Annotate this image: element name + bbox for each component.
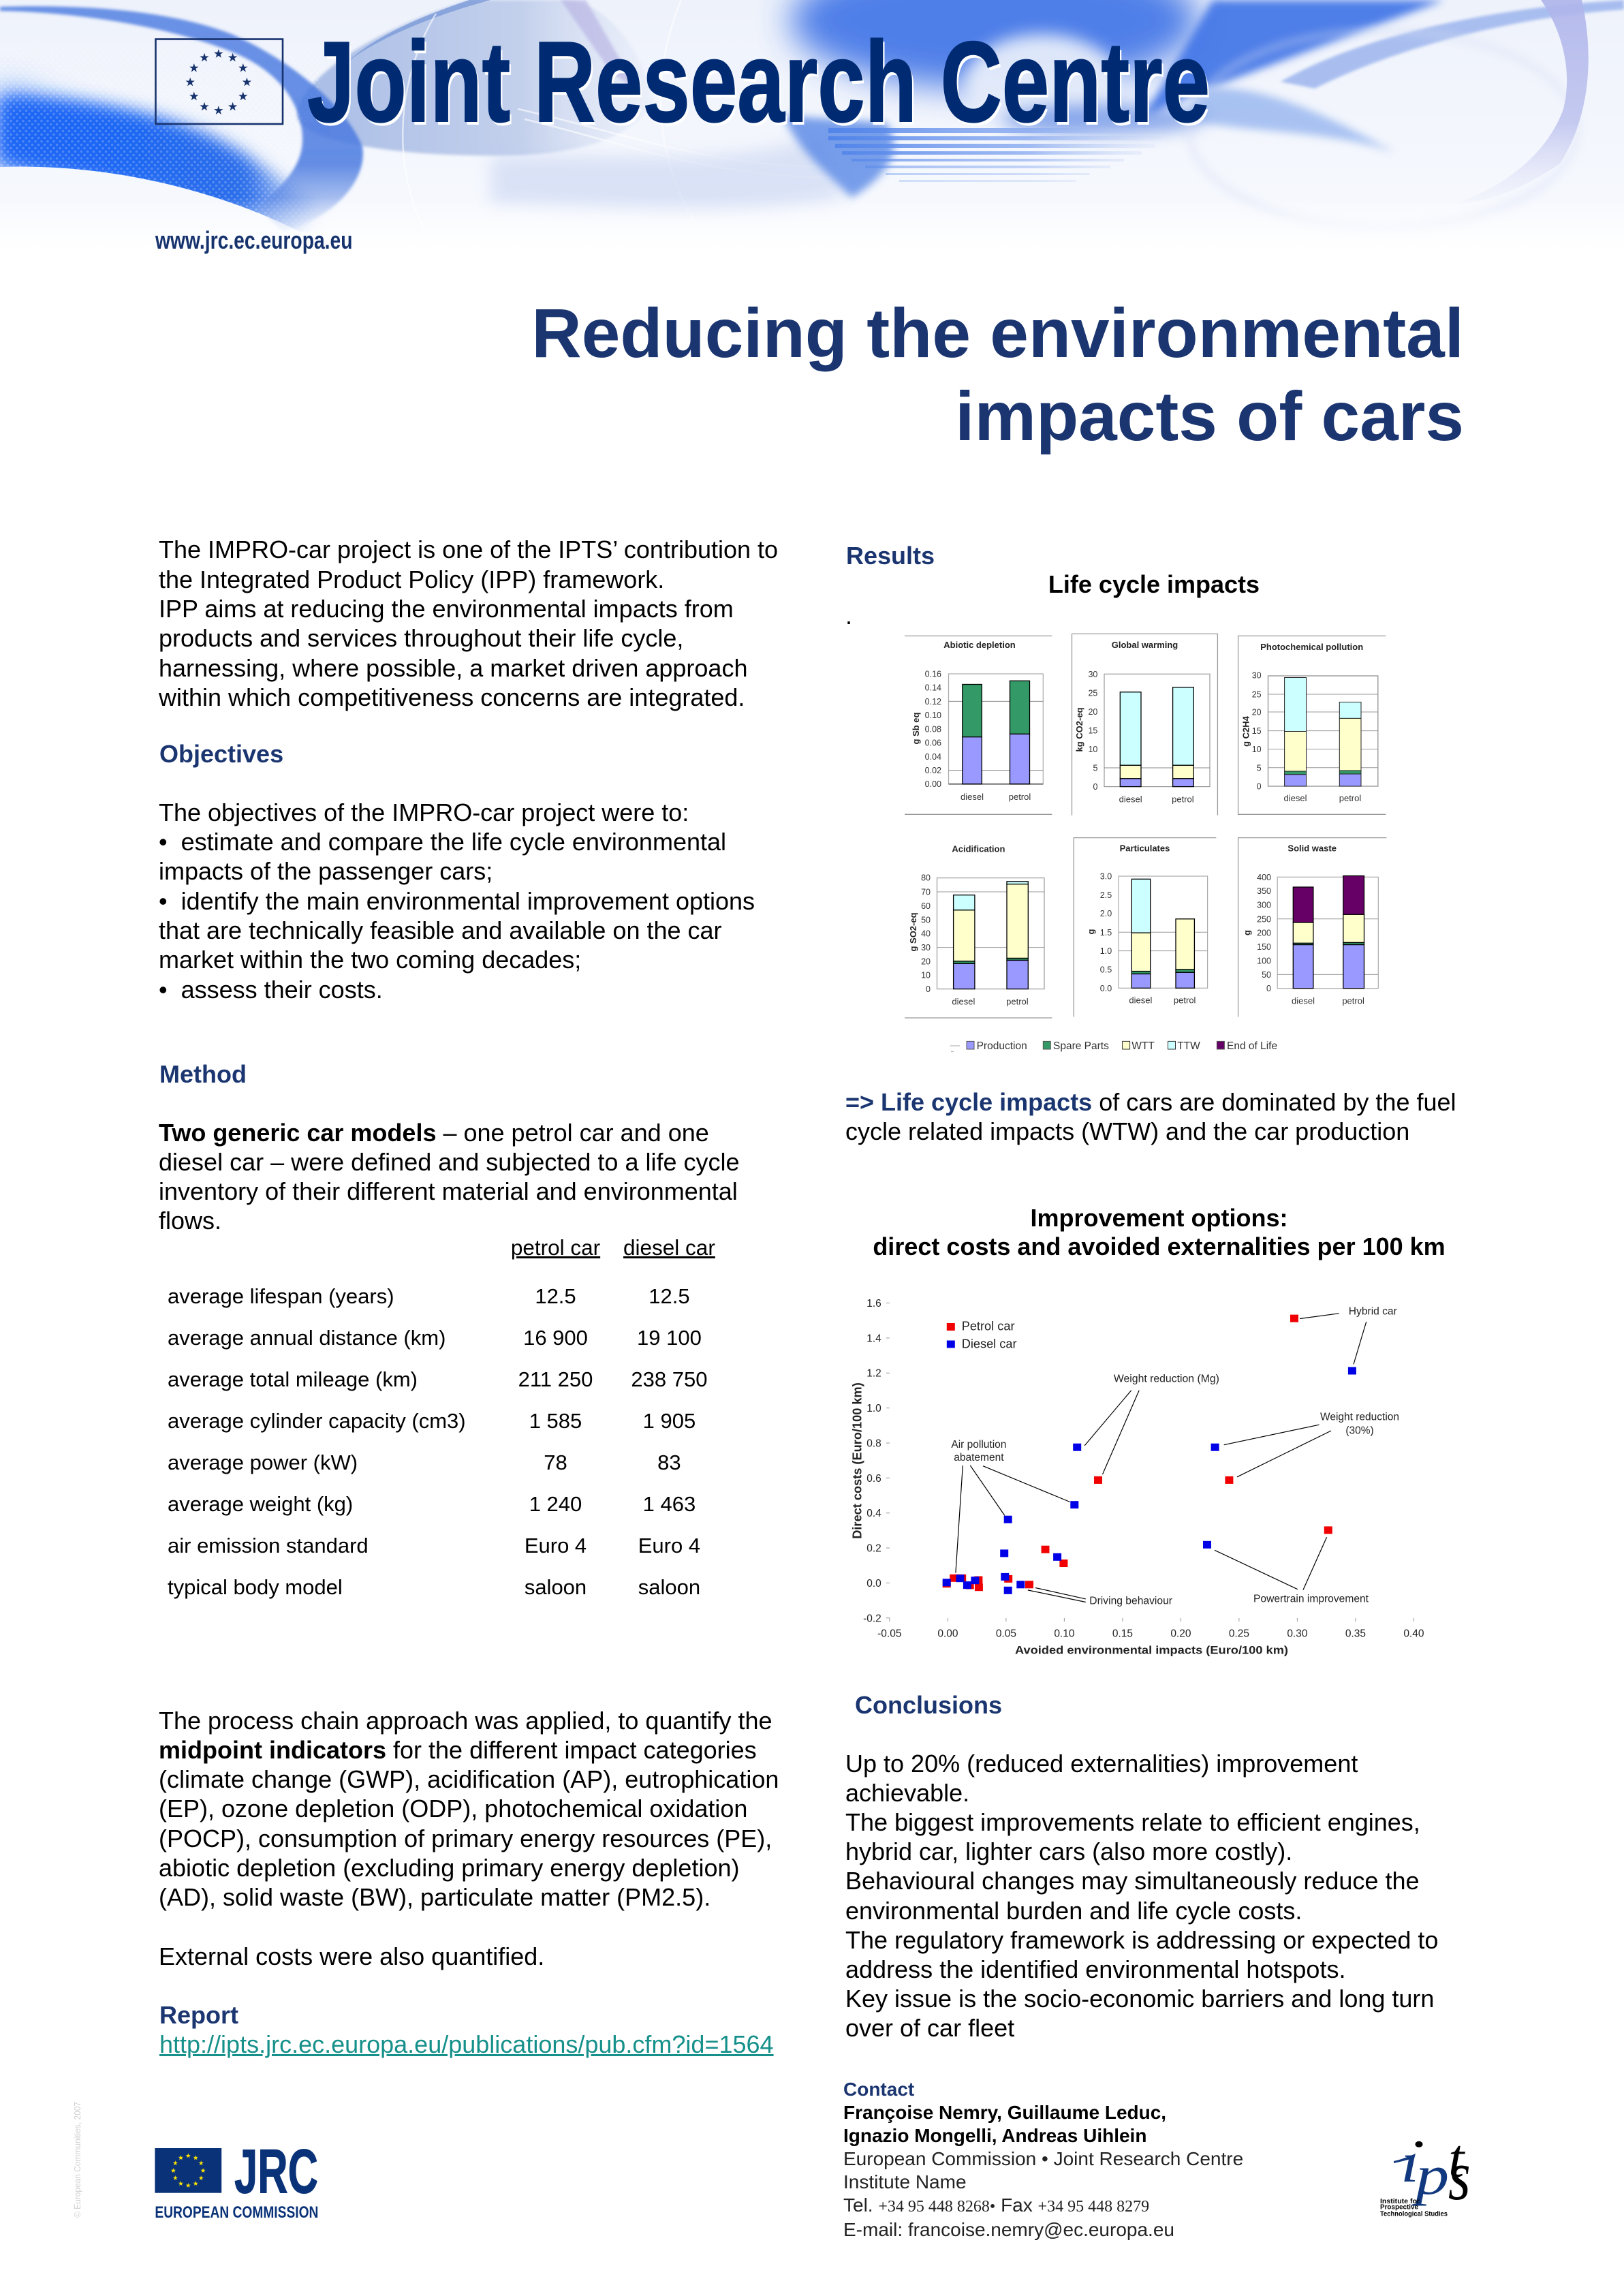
- chart: global warming: 15: [1088, 726, 1097, 736]
- logo: IPTS: Institute for: [1380, 2197, 1420, 2205]
- chart: solid waste: 300: [1257, 901, 1271, 910]
- text block: objectives: [159, 798, 755, 1004]
- chart: particulates: 1.0: [1100, 946, 1112, 956]
- table: car model characteristics: saloon: [525, 1575, 587, 1599]
- scatter chart: direct costs vs avoided environmental impacts: Weight reduction: [1320, 1412, 1399, 1423]
- text block: introduction: within which competitiveness concerns are integrated.: [159, 683, 745, 711]
- scatter chart: direct costs vs avoided environmental impacts: 0.6: [866, 1473, 881, 1485]
- icon: EU flag outline with twelve stars: [155, 40, 283, 124]
- scatter chart: direct costs vs avoided environmental impacts: 0.30: [1287, 1628, 1308, 1639]
- chart: abiotic depletion: petrol: [1009, 792, 1031, 802]
- heading: conclusions: Conclusions: [855, 1691, 1002, 1719]
- scatter chart: direct costs vs avoided environmental impacts: 1.2: [866, 1368, 881, 1380]
- chart: photochemical pollution: 10: [1252, 745, 1262, 754]
- chart: acidification: [905, 843, 1052, 1018]
- legend: petrol and diesel markers: Petrol car: [962, 1320, 1015, 1333]
- table: car model characteristics: air emission standard: [168, 1534, 369, 1557]
- text block: objectives: impacts of the passenger cars;: [159, 857, 493, 885]
- text block: objectives: • estimate and compare the life cycle environmental: [159, 828, 726, 856]
- text block: process chain approach: abiotic depletion (excluding primary energy depletion): [159, 1854, 740, 1882]
- text block: conclusions: The regulatory framework is addressing or expected to: [845, 1926, 1438, 1954]
- chart: abiotic depletion: 0.16: [925, 669, 941, 679]
- chart: abiotic depletion: 0.06: [925, 739, 941, 748]
- chart: particulates: petrol: [1174, 995, 1196, 1005]
- chart: photochemical pollution: g C2H4: [1241, 715, 1251, 747]
- chart: abiotic depletion: [905, 636, 1052, 814]
- legend: petrol and diesel markers: Diesel car: [962, 1337, 1017, 1351]
- text block: contact: [843, 2079, 1243, 2240]
- scatter chart: direct costs vs avoided environmental impacts: [851, 1298, 1424, 1656]
- logo: IPTS: Prospective: [1380, 2203, 1418, 2212]
- chart: solid waste: petrol: [1342, 995, 1364, 1006]
- text block: results finding: cycle related impacts (WTW) and the car production: [845, 1117, 1409, 1145]
- text block: conclusions: address the identified environmental hotspots.: [845, 1955, 1345, 1983]
- scatter chart: direct costs vs avoided environmental impacts: Hybrid car: [1349, 1306, 1397, 1318]
- text block: contact: Institute Name: [843, 2171, 967, 2192]
- chart: solid waste: 50: [1262, 970, 1271, 980]
- chart: photochemical pollution: 25: [1252, 689, 1262, 699]
- chart: abiotic depletion: diesel: [961, 792, 984, 802]
- scatter chart: direct costs vs avoided environmental impacts: abatement: [954, 1452, 1004, 1463]
- header banner background: [0, 0, 1624, 251]
- chart: particulates: Particulates: [1120, 843, 1170, 853]
- text block: contact: Ignazio Mongelli, Andreas Uihlein: [843, 2125, 1146, 2146]
- scatter chart: direct costs vs avoided environmental impacts: Air pollution: [951, 1439, 1006, 1450]
- scatter chart: direct costs vs avoided environmental impacts: 0.25: [1229, 1628, 1249, 1639]
- chart: solid waste: 150: [1257, 942, 1271, 952]
- legend: life cycle stages: Spare Parts: [1053, 1040, 1109, 1052]
- scatter chart: direct costs vs avoided environmental impacts: Powertrain improvement: [1253, 1593, 1369, 1605]
- scatter chart: direct costs vs avoided environmental impacts: -0.05: [877, 1628, 901, 1639]
- chart: photochemical pollution: Photochemical pollution: [1260, 642, 1363, 652]
- logo: IPTS: p: [1411, 2144, 1449, 2206]
- text block: process chain approach: midpoint indicators for the different impact categories: [159, 1736, 757, 1764]
- text block: introduction: products and services throughout their life cycle,: [159, 624, 683, 652]
- chart: abiotic depletion: 0.12: [925, 697, 941, 707]
- chart: acidification: 20: [921, 957, 931, 966]
- heading: objectives: Objectives: [159, 740, 283, 768]
- chart: photochemical pollution: [1238, 636, 1386, 814]
- table: car model characteristics: 12.5: [535, 1284, 576, 1308]
- chart: global warming: 0: [1093, 782, 1097, 792]
- table: car model characteristics: 16 900: [523, 1326, 588, 1350]
- text block: conclusions: [845, 1750, 1438, 2042]
- scatter chart: direct costs vs avoided environmental impacts: 0.20: [1170, 1628, 1191, 1639]
- chart: abiotic depletion: 0.00: [925, 779, 941, 789]
- scatter chart: direct costs vs avoided environmental impacts: (30%): [1345, 1425, 1374, 1436]
- scatter chart: direct costs vs avoided environmental impacts: 0.2: [866, 1542, 881, 1555]
- chart: solid waste: [1238, 838, 1386, 1017]
- table: car model characteristics: 1 905: [643, 1409, 696, 1433]
- legend: life cycle stages: TTW: [1177, 1040, 1200, 1052]
- chart: abiotic depletion: g Sb eq: [911, 712, 921, 744]
- poster title: Reducing the environmental: [531, 294, 1464, 372]
- text block: introduction: harnessing, where possible, a market driven approach: [159, 654, 747, 682]
- chart: abiotic depletion: 0.04: [925, 752, 941, 762]
- chart: acidification: 30: [921, 943, 931, 952]
- scatter chart: direct costs vs avoided environmental impacts: 1.4: [866, 1333, 881, 1344]
- table: car model characteristics: 19 100: [637, 1326, 702, 1350]
- text block: introduction: [159, 536, 778, 711]
- scatter chart: direct costs vs avoided environmental impacts: 0.4: [866, 1508, 881, 1519]
- chart: abiotic depletion: 0.10: [925, 711, 941, 720]
- heading: method: Method: [159, 1060, 247, 1088]
- logo: IPTS: s: [1448, 2135, 1471, 2215]
- text block: method: Two generic car models – one petrol car and one: [159, 1119, 709, 1147]
- text block: conclusions: hybrid car, lighter cars (also more costly).: [845, 1837, 1292, 1865]
- text block: objectives: that are technically feasible and available on the car: [159, 916, 722, 944]
- scatter chart: direct costs vs avoided environmental impacts: 0.15: [1112, 1628, 1133, 1639]
- heading: report: Report: [159, 2001, 238, 2029]
- chart: global warming: 20: [1088, 707, 1097, 717]
- legend: life cycle stages: [950, 1040, 1277, 1052]
- banner URL: www.jrc.ec.europa.eu: [155, 226, 353, 254]
- text block: conclusions: Behavioural changes may simultaneously reduce the: [845, 1867, 1419, 1895]
- poster title: impacts of cars: [955, 377, 1464, 455]
- scatter chart: direct costs vs avoided environmental impacts: 1.0: [866, 1403, 881, 1414]
- text block: method: flows.: [159, 1207, 221, 1235]
- chart: solid waste: 250: [1257, 914, 1271, 924]
- text block: introduction: The IMPRO-car project is one of the IPTS’ contribution to: [159, 536, 778, 563]
- chart: solid waste: 350: [1257, 886, 1271, 896]
- chart heading: improvement options: [873, 1204, 1446, 1260]
- scatter chart: direct costs vs avoided environmental impacts: 0.10: [1054, 1628, 1075, 1639]
- table: car model characteristics: Euro 4: [525, 1534, 587, 1557]
- chart: abiotic depletion: Abiotic depletion: [943, 640, 1016, 650]
- text block: results finding: [845, 1088, 1456, 1145]
- table: car model characteristics: saloon: [638, 1575, 700, 1599]
- scatter chart: direct costs vs avoided environmental impacts: 1.6: [866, 1298, 881, 1309]
- chart: global warming: [1072, 634, 1217, 816]
- chart: acidification: g SO2-eq: [908, 912, 918, 952]
- text block: contact: E-mail: francoise.nemry@ec.europa.eu: [843, 2219, 1174, 2240]
- text block: process chain approach: (POCP), consumption of primary energy resources (PE),: [159, 1825, 772, 1852]
- chart: particulates: [1074, 838, 1216, 1017]
- chart: solid waste: 0: [1266, 984, 1271, 993]
- chart: solid waste: 400: [1257, 873, 1271, 882]
- legend: life cycle stages: WTT: [1131, 1040, 1155, 1052]
- table: car model characteristics: petrol car: [511, 1235, 600, 1260]
- chart: solid waste: 100: [1257, 957, 1271, 966]
- text block: results finding: => Life cycle impacts of cars are dominated by the fuel: [845, 1088, 1456, 1116]
- text block: introduction: IPP aims at reducing the environmental impacts from: [159, 595, 734, 623]
- scatter chart: direct costs vs avoided environmental impacts: Weight reduction (Mg): [1114, 1374, 1219, 1384]
- legend: life cycle stages: End of Life: [1227, 1040, 1277, 1052]
- table: car model characteristics: average annual distance (km): [168, 1326, 446, 1350]
- text block: process chain approach: (EP), ozone depletion (ODP), photochemical oxidation: [159, 1795, 747, 1822]
- chart: solid waste: 200: [1257, 929, 1271, 938]
- poster title: [531, 294, 1464, 455]
- text block: method: diesel car – were defined and subjected to a life cycle: [159, 1148, 740, 1176]
- text block: contact: Contact: [843, 2079, 914, 2100]
- chart: global warming: kg CO2-eq: [1074, 707, 1084, 752]
- chart: particulates: 3.0: [1100, 872, 1112, 882]
- chart heading: improvement options: Improvement options:: [1030, 1204, 1288, 1232]
- chart: solid waste: g: [1242, 930, 1252, 935]
- chart: photochemical pollution: 15: [1252, 726, 1262, 736]
- chart: photochemical pollution: diesel: [1284, 793, 1307, 803]
- chart: photochemical pollution: petrol: [1339, 793, 1361, 803]
- chart: particulates: 0.0: [1100, 984, 1112, 993]
- table: car model characteristics: 238 750: [631, 1367, 707, 1391]
- chart: acidification: 0: [926, 984, 931, 994]
- scatter chart: direct costs vs avoided environmental impacts: 0.0: [866, 1578, 881, 1589]
- chart: photochemical pollution: 0: [1257, 782, 1262, 792]
- text block: contact: Françoise Nemry, Guillaume Leduc,: [843, 2102, 1166, 2123]
- logo: JRC European Commission: JRC: [234, 2137, 318, 2207]
- chart: global warming: 10: [1088, 745, 1097, 754]
- heading: results: Results: [846, 542, 935, 570]
- link: report URL: http://ipts.jrc.ec.europa.eu/publications/pub.cfm?id=1564: [159, 2030, 774, 2058]
- scatter chart: direct costs vs avoided environmental impacts: 0.8: [866, 1438, 881, 1450]
- table: car model characteristics: 1 585: [529, 1409, 582, 1433]
- table: car model characteristics: 83: [657, 1450, 681, 1474]
- chart: particulates: 2.0: [1100, 909, 1112, 918]
- text block: external costs: External costs were also quantified.: [159, 1942, 544, 1970]
- table: car model characteristics: Euro 4: [638, 1534, 700, 1557]
- chart: global warming: 25: [1088, 688, 1097, 698]
- chart: particulates: 0.5: [1100, 965, 1112, 974]
- chart: particulates: 2.5: [1100, 890, 1112, 900]
- chart: acidification: 10: [921, 971, 931, 980]
- chart: acidification: 70: [921, 887, 931, 897]
- chart: photochemical pollution: 20: [1252, 707, 1262, 717]
- chart: particulates: 1.5: [1100, 928, 1112, 937]
- logo: IPTS: i: [1401, 2130, 1419, 2194]
- scatter chart: direct costs vs avoided environmental impacts: 0.35: [1345, 1628, 1366, 1639]
- text block: conclusions: The biggest improvements relate to efficient engines,: [845, 1808, 1420, 1836]
- table: car model characteristics: 78: [544, 1450, 567, 1474]
- chart heading: improvement options: direct costs and avoided externalities per 100 km: [873, 1232, 1446, 1260]
- table: car model characteristics: average weight (kg): [168, 1492, 353, 1516]
- chart: acidification: 50: [921, 915, 931, 925]
- logo: IPTS: t: [1448, 2128, 1466, 2189]
- text block: objectives: • identify the main environmental improvement options: [159, 887, 755, 915]
- chart: particulates: g: [1086, 929, 1096, 934]
- text block: conclusions: environmental burden and life cycle costs.: [845, 1897, 1302, 1925]
- chart: photochemical pollution: 5: [1257, 763, 1262, 773]
- legend: life cycle stages: Production: [977, 1040, 1027, 1052]
- table: car model characteristics: 1 240: [529, 1492, 582, 1516]
- chart: abiotic depletion: 0.02: [925, 766, 941, 775]
- chart: global warming: 5: [1093, 763, 1097, 773]
- text block: process chain approach: [159, 1707, 779, 1911]
- scatter chart: direct costs vs avoided environmental impacts: -0.2: [863, 1613, 881, 1624]
- table: car model characteristics: 211 250: [518, 1367, 593, 1391]
- scatter chart: direct costs vs avoided environmental impacts: Direct costs (Euro/100 km): [851, 1382, 864, 1539]
- chart: photochemical pollution: 30: [1252, 670, 1262, 680]
- text block: objectives: market within the two coming decades;: [159, 946, 581, 974]
- banner title: Joint Research Centre: Joint Research Centre: [307, 18, 1210, 146]
- chart: particulates: diesel: [1129, 995, 1152, 1005]
- chart: acidification: diesel: [952, 997, 975, 1007]
- scatter chart: direct costs vs avoided environmental impacts: Avoided environmental impacts (Euro/100 km): [1015, 1643, 1288, 1656]
- copyright note: © European Communities, 2007: [73, 2102, 82, 2218]
- text block: process chain approach: The process chain approach was applied, to quantify the: [159, 1707, 772, 1735]
- text block: method: inventory of their different material and environmental: [159, 1177, 738, 1205]
- table: car model characteristics: average cylinder capacity (cm3): [168, 1409, 466, 1433]
- scatter chart: direct costs vs avoided environmental impacts: Driving behaviour: [1089, 1596, 1172, 1607]
- legend: petrol and diesel markers: [947, 1320, 1017, 1351]
- chart heading: life cycle impacts: Life cycle impacts: [1048, 570, 1260, 598]
- panel: life cycle impact bar charts: [905, 634, 1386, 1052]
- text block: process chain approach: (AD), solid waste (BW), particulate matter (PM2.5).: [159, 1883, 710, 1911]
- logo: IPTS: Technological Studies: [1380, 2210, 1448, 2218]
- chart: solid waste: diesel: [1292, 995, 1315, 1006]
- chart: global warming: Global warming: [1112, 640, 1178, 650]
- logo: JRC European Commission: EUROPEAN COMMISSION: [155, 2203, 318, 2222]
- logo: IPTS: [1380, 2128, 1471, 2218]
- text block: conclusions: Key issue is the socio-economic barriers and long turn: [845, 1985, 1434, 2013]
- table: car model characteristics: average total mileage (km): [168, 1367, 418, 1391]
- chart: abiotic depletion: 0.08: [925, 724, 941, 734]
- table: car model characteristics: average lifespan (years): [168, 1284, 394, 1308]
- text block: objectives: The objectives of the IMPRO-car project were to:: [159, 798, 689, 826]
- chart: abiotic depletion: 0.14: [925, 683, 941, 693]
- text block: process chain approach: (climate change (GWP), acidification (AP), eutrophication: [159, 1765, 779, 1793]
- scatter chart: direct costs vs avoided environmental impacts: 0.00: [937, 1628, 958, 1639]
- chart: solid waste: Solid waste: [1287, 843, 1337, 853]
- text block: contact: Tel. +34 95 448 8268• Fax +34 95 448 8279: [843, 2194, 1149, 2216]
- chart: acidification: 60: [921, 901, 931, 911]
- chart: global warming: 30: [1088, 670, 1097, 679]
- table: car model characteristics: average power (kW): [168, 1450, 358, 1474]
- scatter chart: direct costs vs avoided environmental impacts: 0.05: [996, 1628, 1016, 1639]
- stray period: .: [845, 602, 852, 630]
- chart: acidification: 80: [921, 873, 931, 883]
- text block: introduction: the Integrated Product Policy (IPP) framework.: [159, 565, 664, 593]
- scatter chart: direct costs vs avoided environmental impacts: 0.40: [1403, 1628, 1424, 1639]
- chart: acidification: petrol: [1006, 997, 1029, 1007]
- chart: acidification: Acidification: [952, 843, 1005, 854]
- chart: global warming: diesel: [1119, 794, 1142, 804]
- table: car model characteristics: diesel car: [623, 1235, 715, 1260]
- text block: method: [159, 1119, 740, 1235]
- chart: acidification: 40: [921, 929, 931, 939]
- text block: conclusions: achievable.: [845, 1779, 969, 1807]
- text block: conclusions: Up to 20% (reduced externalities) improvement: [845, 1750, 1358, 1777]
- table: car model characteristics: 1 463: [643, 1492, 696, 1516]
- table: car model characteristics: 12.5: [649, 1284, 690, 1308]
- logo: JRC European Commission: [155, 2137, 318, 2222]
- table: car model characteristics: [168, 1235, 715, 1599]
- text block: objectives: • assess their costs.: [159, 976, 383, 1004]
- chart: global warming: petrol: [1172, 794, 1194, 804]
- table: car model characteristics: typical body model: [168, 1575, 343, 1599]
- text block: conclusions: over of car fleet: [845, 2014, 1014, 2042]
- text block: contact: European Commission • Joint Research Centre: [843, 2148, 1243, 2169]
